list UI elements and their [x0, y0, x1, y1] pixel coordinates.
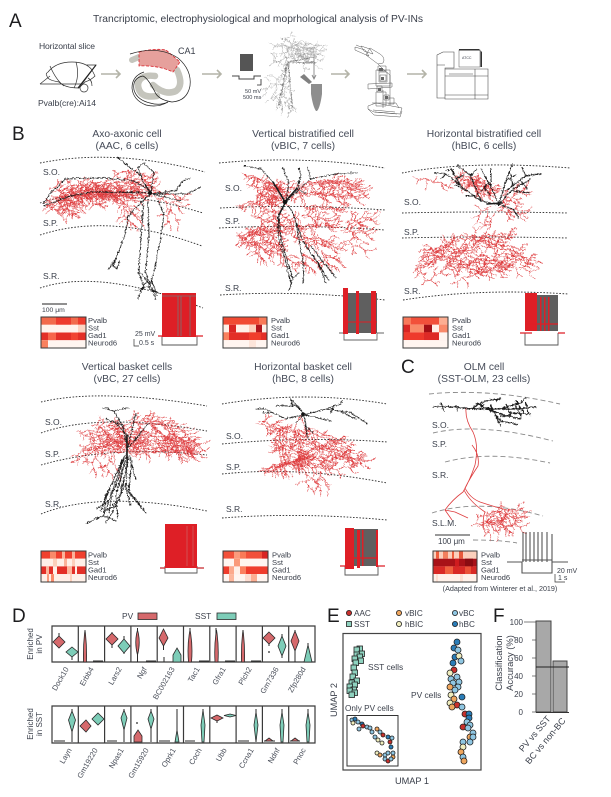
panel letter A: A	[9, 11, 22, 32]
title: vertical bistratified cell: (vBIC, 7 cells)	[271, 141, 335, 152]
black dendrites and soma	[243, 165, 357, 290]
voltage trace	[160, 524, 204, 573]
title: vertical basket cells: Vertical basket cells	[82, 362, 172, 373]
heatmap gene labels: Gad1	[88, 331, 107, 340]
heatmap: vBIC gene expression	[223, 317, 267, 348]
heatmap gene labels	[481, 550, 510, 582]
gene labels: enriched in SST: Pnoc	[291, 746, 308, 766]
title: horizontal basket cell: (hBC, 8 cells)	[272, 374, 334, 385]
voltage trace	[520, 293, 565, 345]
layer labels: S.P.	[45, 449, 60, 459]
tube	[300, 58, 322, 111]
axis label: enriched in SST: Enriched	[26, 708, 35, 740]
layer labels: S.O.	[225, 183, 242, 193]
gene labels: enriched in PV: Zfp280d	[286, 666, 308, 694]
axis title: Classification	[493, 635, 504, 691]
axis label: enriched in PV: Enriched	[26, 628, 35, 660]
title: horizontal basket cell: Horizontal basket cell	[254, 362, 352, 373]
legend: cell types: hBIC	[405, 620, 423, 629]
panel A: experimental workflow	[9, 11, 488, 120]
PV cell cluster	[447, 639, 476, 764]
heatmap gene labels	[452, 316, 481, 348]
violin plots: enriched in SST	[52, 706, 315, 743]
gene labels: enriched in SST	[58, 746, 308, 780]
electrophysiology trace with scale: 50 mV	[245, 89, 261, 95]
heatmap gene labels: Sst	[88, 324, 100, 332]
layer boundaries	[219, 160, 385, 300]
layer boundaries	[222, 397, 387, 520]
gene labels: enriched in PV: Plch2	[236, 666, 254, 686]
heatmap: AAC gene expression	[41, 317, 86, 348]
label: horizontal slice: Horizontal slice	[39, 41, 95, 51]
arrow: slice to CA1	[101, 70, 120, 78]
gene labels: enriched in PV: Erbb4	[78, 666, 96, 688]
legend: PV and SST	[122, 611, 236, 621]
red axon arbor	[38, 164, 191, 236]
scale bar 100 μm	[42, 304, 67, 314]
cell: axo-axonic	[38, 129, 205, 348]
electrophysiology trace with scale	[232, 54, 262, 101]
bar chart	[536, 621, 569, 712]
title: horizontal bistratified cell: Horizontal bistratified cell	[427, 129, 541, 140]
layer labels	[45, 417, 62, 509]
voltage trace: 1 s	[558, 575, 568, 582]
panel A title: Trancriptomic, electrophysiological and moprhological analysis of PV-INs	[93, 14, 423, 25]
title: OLM cell: OLM cell	[464, 362, 504, 373]
red axon arbor	[230, 166, 383, 280]
red axon arbor	[253, 410, 376, 501]
black dendrites and soma	[255, 398, 367, 438]
heatmap: OLM gene expression	[433, 551, 477, 582]
cell: horizontal basket	[222, 362, 387, 582]
legend: cell types: vBIC	[405, 609, 423, 618]
heatmap gene labels: Neurod6	[88, 573, 117, 582]
gene labels: enriched in PV: BC002163	[151, 666, 177, 701]
legend: cell types: hBC	[459, 620, 475, 629]
layer labels: S.P.	[225, 216, 240, 226]
heatmap gene labels: Pvalb	[88, 550, 107, 560]
layer labels: S.O.	[45, 417, 62, 427]
heatmap gene labels: Gad1	[452, 331, 471, 340]
y axis ticks: 20	[514, 690, 524, 699]
scale bar 100 μm: 100 μm	[42, 307, 65, 314]
axis label: enriched in PV: in PV	[35, 634, 44, 654]
panel letter F: F	[493, 606, 505, 627]
axis label: UMAP 1: UMAP 1	[395, 776, 429, 786]
panel letter D: D	[12, 606, 26, 627]
layer labels: S.O.	[432, 420, 449, 430]
gene labels: enriched in SST: Layn	[58, 746, 74, 765]
layer labels: S.P.	[404, 227, 419, 237]
black dendrites and soma	[433, 163, 540, 217]
gene labels: enriched in PV: Lars2	[106, 666, 124, 686]
label: Pvalb cre line: Pvalb(cre):Ai14	[38, 98, 96, 108]
voltage trace	[134, 293, 203, 347]
title: vertical basket cells: (vBC, 27 cells)	[94, 374, 160, 385]
heatmap gene labels: Pvalb	[452, 316, 471, 325]
violin plots: enriched in PV	[52, 626, 315, 662]
heatmap gene labels: Sst	[271, 324, 283, 332]
layer labels: S.O.	[226, 431, 243, 441]
layer labels: S.O.	[43, 167, 60, 177]
UMAP frame	[343, 634, 481, 770]
gene labels: enriched in PV: Dock10	[50, 666, 71, 692]
y axis ticks: 0	[519, 708, 524, 717]
title: OLM cell: (SST-OLM, 23 cells)	[438, 374, 530, 385]
axis label: enriched in SST: in SST	[35, 712, 44, 736]
layer labels: S.L.M.	[432, 518, 457, 528]
voltage trace	[339, 288, 384, 340]
gene labels: enriched in SST: Ccna1	[237, 746, 256, 770]
gene labels: enriched in SST: Coch	[187, 746, 204, 766]
bar labels: BC vs non-BC	[523, 715, 568, 766]
arrow: neuron to microscope	[331, 70, 349, 78]
electrophysiology trace with scale: 500 ms	[243, 95, 262, 101]
gene labels: enriched in PV: Ngf	[135, 665, 149, 680]
heatmap gene labels: Pvalb	[481, 550, 500, 560]
icon: sequencing instrument	[437, 49, 488, 99]
arrow: slice to recording	[202, 70, 221, 78]
heatmap gene labels: Gad1	[271, 331, 290, 340]
voltage trace	[507, 532, 578, 582]
heatmap: hBIC gene expression	[403, 317, 448, 348]
gene labels: enriched in PV: Tac1	[186, 666, 202, 684]
axis title: Accuracy (%)	[504, 635, 515, 691]
gene labels: enriched in SST: Gm19220	[75, 746, 100, 780]
heatmap gene labels	[271, 316, 300, 348]
panel letter E: E	[327, 606, 340, 627]
voltage trace: 0.5 s	[139, 340, 155, 347]
red axon arbor	[406, 166, 542, 293]
heatmap gene labels: Neurod6	[271, 338, 300, 348]
icon: sequencing instrument: ATCC	[462, 56, 472, 60]
arrow: microscope to sequencer	[407, 70, 426, 78]
cell: vertical bistratified	[219, 129, 385, 348]
legend: cell types	[346, 609, 475, 629]
heatmap: hBC gene expression	[223, 551, 268, 582]
inset PV cell points	[350, 717, 395, 763]
legend: PV and SST: SST	[195, 611, 211, 621]
scale bar 100 μm: 100 μm	[438, 537, 465, 546]
icon: hippocampus with CA1 region	[130, 46, 196, 106]
layer labels	[404, 197, 421, 296]
gene labels: enriched in PV	[50, 665, 308, 701]
heatmap gene labels	[88, 550, 117, 582]
legend: cell types: vBC	[459, 609, 475, 618]
icon: microscope	[355, 45, 402, 117]
heatmap gene labels: Neurod6	[481, 573, 510, 582]
layer boundaries	[402, 165, 570, 300]
panel D: differentially expressed genes	[12, 606, 315, 780]
y axis ticks: 40	[514, 672, 524, 681]
cell: horizontal bistratified	[402, 129, 570, 348]
gene labels: enriched in PV: Gfra1	[210, 666, 228, 686]
y axis ticks: 80	[514, 636, 524, 645]
heatmap gene labels: Neurod6	[272, 573, 301, 582]
red axon arbor	[67, 407, 210, 486]
y axis ticks	[510, 618, 536, 717]
title: axo-axonic cell: (AAC, 6 cells)	[96, 141, 158, 152]
legend: cell types: SST	[354, 620, 370, 629]
axis label: UMAP 2: UMAP 2	[329, 683, 339, 717]
heatmap gene labels: Sst	[272, 558, 284, 567]
bar labels: PV vs SST	[517, 713, 553, 754]
gene labels: enriched in SST: Ndnf	[266, 746, 282, 765]
gene labels: enriched in SST: Ubb	[214, 746, 229, 763]
title: axo-axonic cell: Axo-axonic cell	[92, 129, 162, 140]
panel B: PV interneuron morphologies	[12, 124, 570, 582]
heatmap gene labels: Pvalb	[88, 316, 107, 325]
title: horizontal bistratified cell: (hBIC, 6 cells)	[452, 141, 516, 152]
layer labels: S.R.	[45, 499, 62, 509]
black dendrites	[433, 397, 535, 425]
layer boundaries	[40, 157, 205, 308]
SST cell cluster	[347, 646, 364, 698]
source note: (Adapted from Winterer et al., 2019)	[443, 584, 557, 593]
label: PV cells: PV cells	[411, 690, 441, 700]
voltage trace: 20 mV	[557, 568, 578, 575]
layer labels	[43, 167, 60, 281]
heatmap gene labels: Sst	[88, 558, 100, 567]
heatmap gene labels: Neurod6	[88, 338, 117, 348]
icon: mouse brain with slice plane	[40, 62, 96, 92]
cell: vertical basket	[41, 362, 210, 582]
legend: PV and SST: PV	[122, 611, 134, 621]
panel F: classification accuracy	[493, 606, 569, 766]
red axon	[445, 408, 530, 546]
layer labels: S.P.	[43, 218, 58, 228]
gene labels: enriched in SST: Npas1	[107, 746, 126, 770]
heatmap gene labels: Gad1	[272, 566, 291, 574]
label: CA1: CA1	[178, 46, 196, 56]
layer boundaries	[41, 396, 207, 514]
layer labels: S.P.	[432, 439, 447, 449]
black dendrites and soma	[42, 157, 200, 298]
black dendrites and soma	[85, 407, 147, 523]
title: vertical bistratified cell: Vertical bistratified cell	[252, 129, 354, 140]
heatmap gene labels	[88, 316, 117, 348]
legend: cell types: AAC	[354, 609, 371, 618]
gene labels: enriched in SST: Gm15920	[126, 746, 151, 780]
heatmap gene labels: Sst	[452, 324, 464, 332]
layer labels: S.R.	[404, 286, 421, 296]
layer labels: S.O.	[404, 197, 421, 207]
scale bar 100 μm	[435, 535, 470, 546]
heatmap gene labels: Pvalb	[272, 550, 291, 560]
layer labels: S.P.	[226, 462, 241, 472]
layer labels	[432, 420, 457, 528]
voltage trace	[340, 528, 385, 575]
panel E: UMAP	[327, 606, 481, 786]
y axis ticks: 100	[510, 618, 524, 627]
label: SST cells: SST cells	[368, 662, 403, 672]
panel letter B: B	[12, 124, 25, 145]
label: only PV cells: Only PV cells	[345, 704, 394, 713]
heatmap gene labels: Neurod6	[452, 338, 481, 348]
heatmap gene labels	[272, 550, 301, 582]
inset frame	[347, 716, 398, 766]
y axis ticks: 60	[514, 654, 524, 663]
layer labels	[226, 431, 243, 514]
layer labels	[225, 183, 242, 293]
panel letter C: C	[401, 357, 415, 378]
panel C: OLM cell	[401, 357, 578, 593]
heatmap: vBC gene expression	[41, 551, 86, 582]
heatmap gene labels: Gad1	[88, 566, 107, 574]
layer labels: S.R.	[226, 504, 243, 514]
layer labels: S.R.	[225, 283, 242, 293]
gene labels: enriched in SST: Oprk1	[160, 746, 178, 769]
layer labels: S.R.	[43, 271, 60, 281]
heatmap gene labels: Sst	[481, 558, 493, 567]
layer labels: S.R.	[432, 470, 449, 480]
heatmap gene labels: Pvalb	[271, 316, 290, 325]
voltage trace: 25 mV	[135, 331, 156, 338]
heatmap gene labels: Gad1	[481, 566, 500, 574]
layer boundaries	[429, 392, 560, 543]
gene labels: enriched in PV: Gm7336	[258, 666, 281, 695]
gray patched neuron and aspiration	[255, 28, 327, 120]
